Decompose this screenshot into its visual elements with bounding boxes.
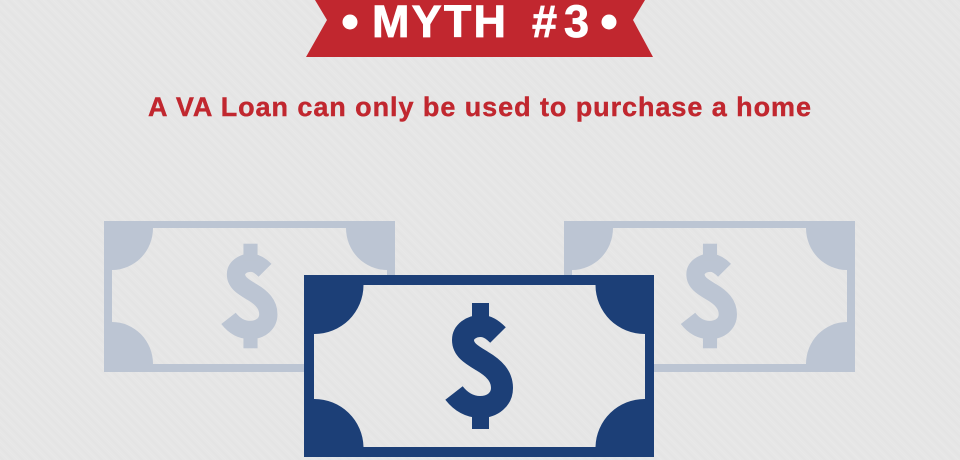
icon: faded right bill <box>564 221 855 372</box>
banner: myth number <box>306 0 653 57</box>
icon: faded left bill <box>104 221 395 372</box>
icon: dollar sign <box>454 303 502 429</box>
icon: main blue bill <box>304 275 654 457</box>
subtitle text: A VA Loan can only be used to purchase a home <box>148 92 811 122</box>
